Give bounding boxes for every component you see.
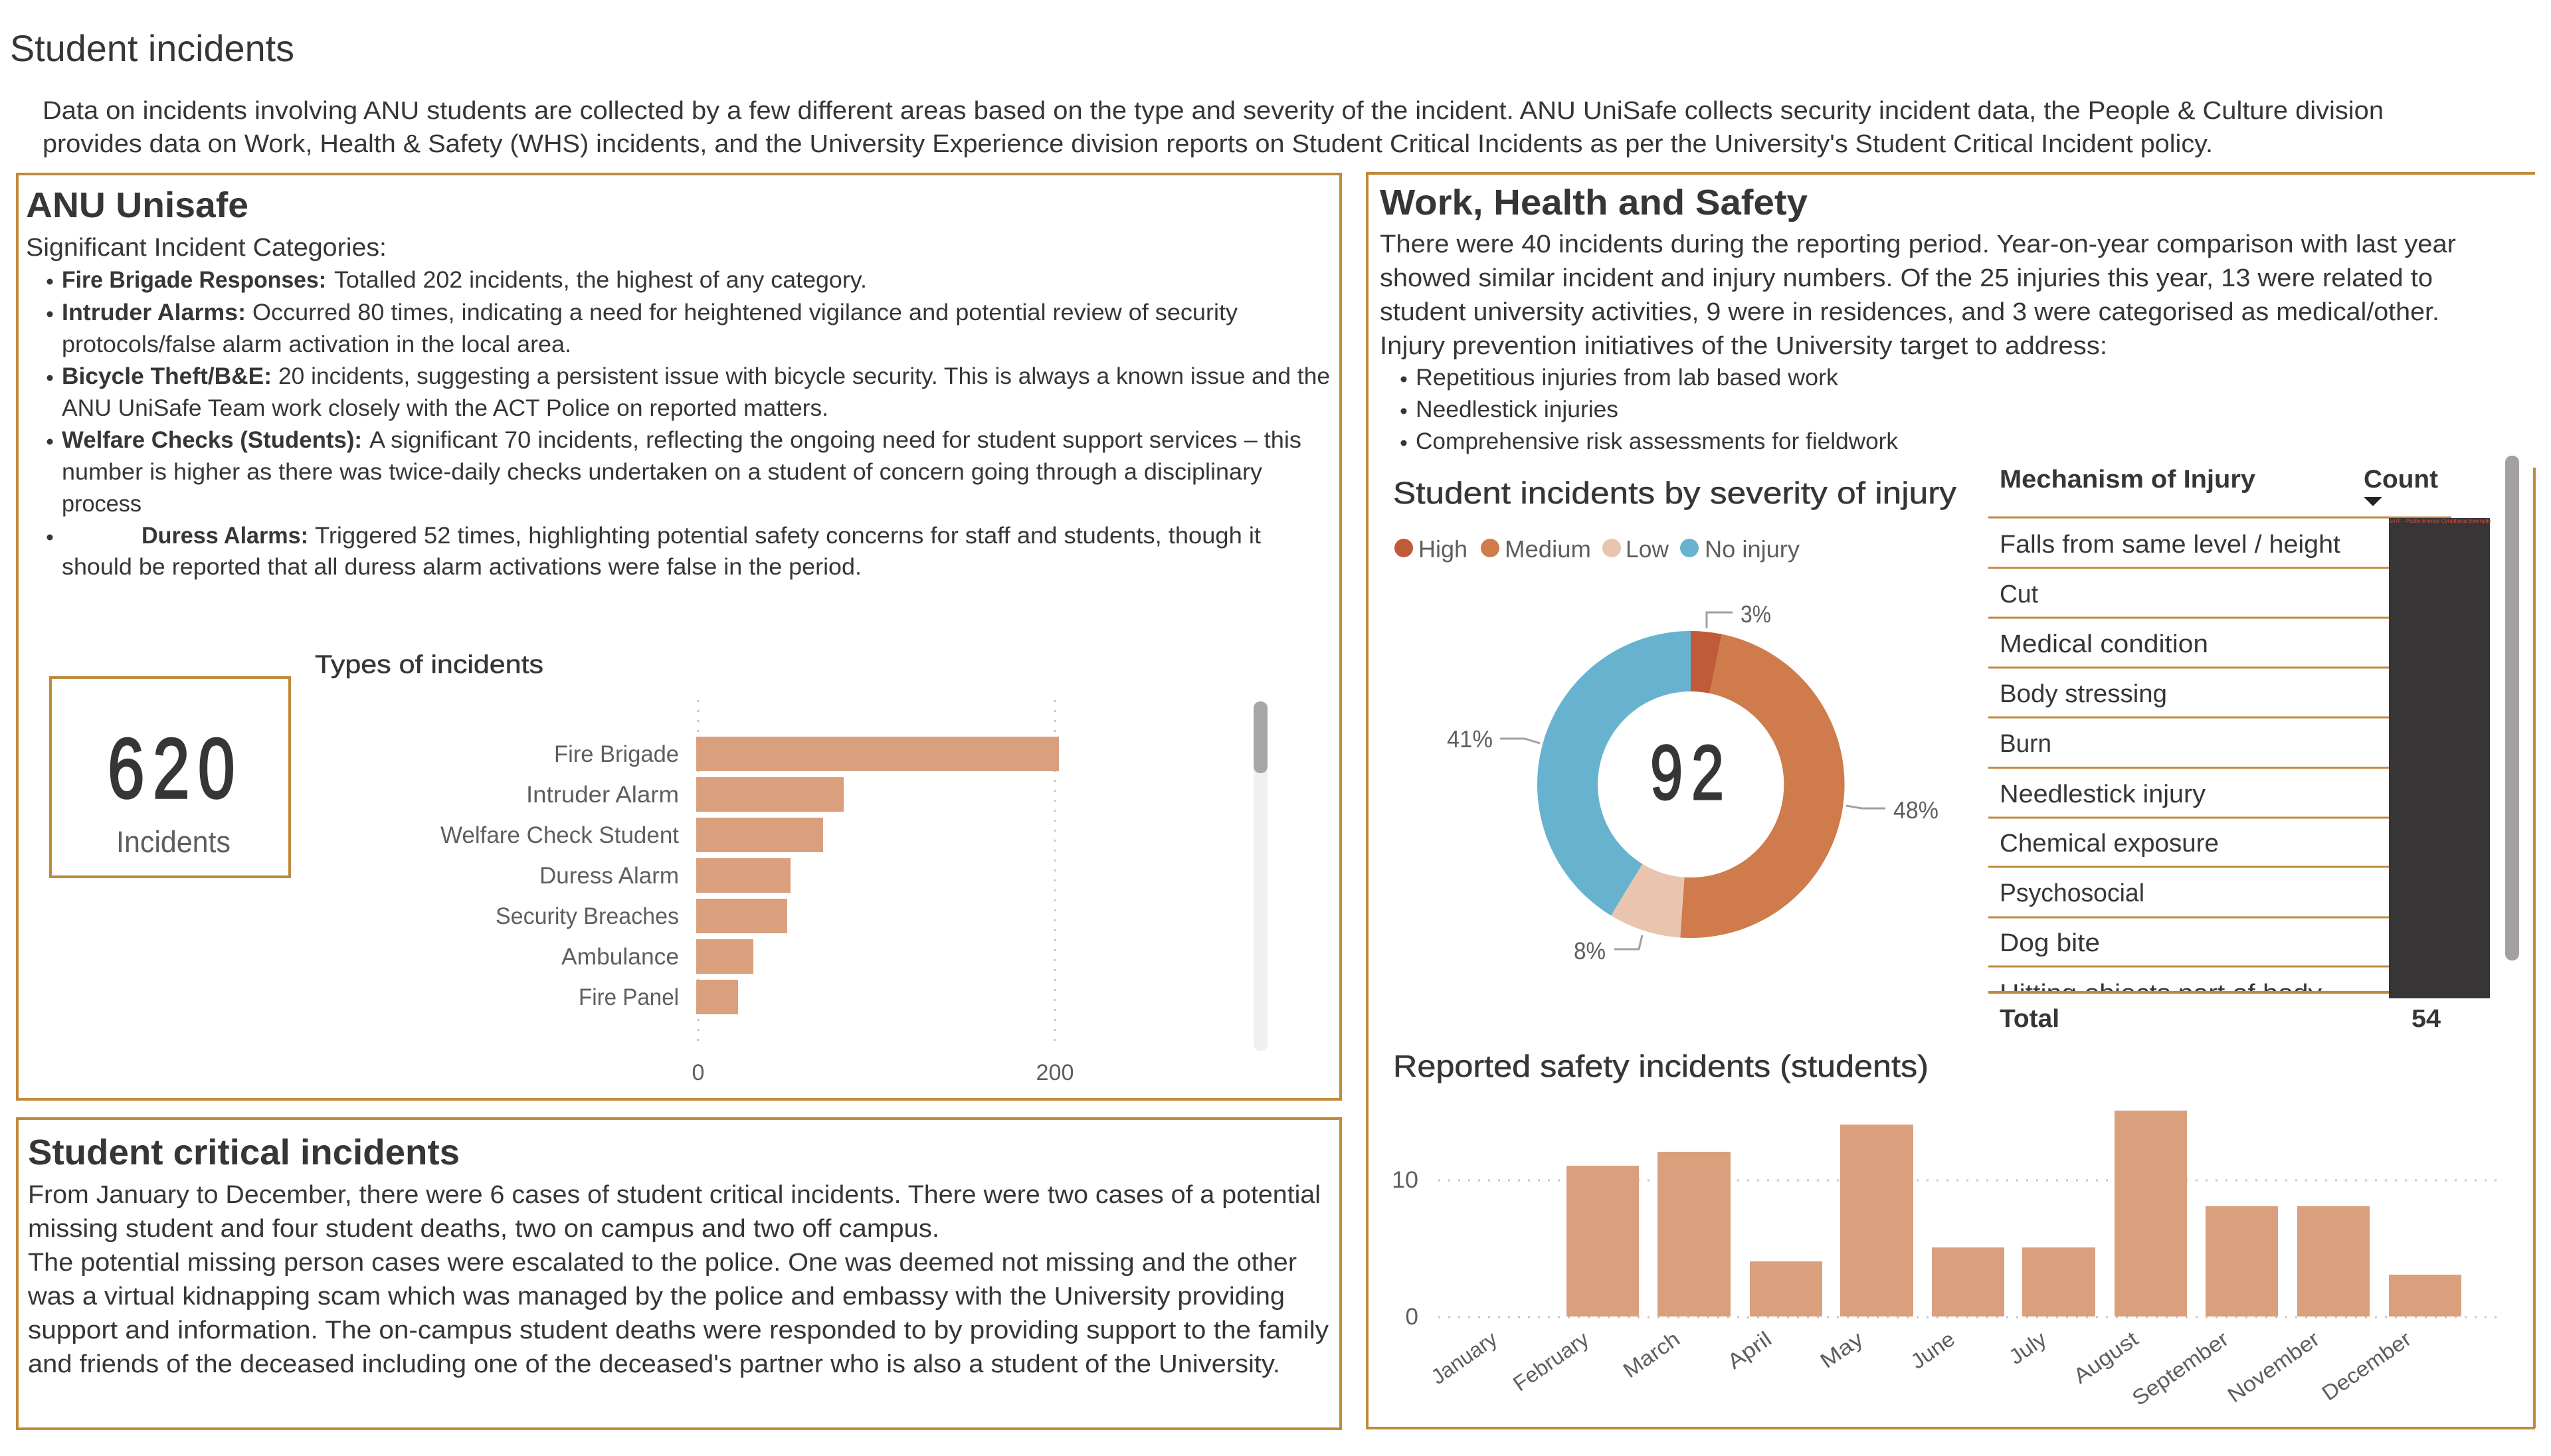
legend: High xyxy=(1418,535,1467,563)
table rows: Cut xyxy=(2000,581,2038,608)
heading: Work, Health and Safety: Work, Health and Safety xyxy=(1380,183,1808,223)
panel: Work, Health and Safety xyxy=(1367,173,2535,1428)
chart title: Student incidents by severity of injury xyxy=(1393,476,1956,510)
heading: Student critical incidents: Student critical incidents xyxy=(28,1133,460,1172)
table: mechanism of injury xyxy=(1988,456,2519,1033)
table rows: Burn xyxy=(2000,730,2051,758)
donut slices xyxy=(1537,631,1845,938)
bullet list: incident categories: Duress Alarms: xyxy=(142,523,308,549)
KPI card: 620 incidents: 620 xyxy=(108,721,243,816)
bullet list: incident categories: process xyxy=(62,491,142,517)
intro text: provides data on Work, Health & Safety (WHS) incidents, and the University Experience division reports on Student Critical Incidents as per the University's Student Critical Incident policy. xyxy=(43,130,2213,158)
month labels xyxy=(1427,1326,2415,1410)
donut centre value: 92 xyxy=(1650,729,1733,816)
heading: ANU Unisafe: ANU Unisafe xyxy=(26,185,248,225)
month labels: September xyxy=(2128,1326,2233,1410)
table scrollbar xyxy=(2505,456,2519,960)
table rows: Hitting objects part of body xyxy=(2000,980,2322,1008)
category labels: Security Breaches xyxy=(496,903,679,929)
bullet list: incident categories: Occurred 80 times, indicating a need for heightened vigilance and potential review of security xyxy=(252,300,1238,325)
category labels: Fire Panel xyxy=(579,984,679,1010)
bullet list: injury prevention xyxy=(1400,365,1898,454)
columns xyxy=(1566,1111,2461,1317)
table total row xyxy=(2000,1005,2441,1033)
month labels: December xyxy=(2317,1326,2415,1406)
data labels xyxy=(1447,600,1938,964)
bullet list: incident categories: protocols/false alarm activation in the local area. xyxy=(62,331,571,357)
redacted count column xyxy=(2389,517,2491,998)
month labels: June xyxy=(1906,1326,1959,1374)
month labels: February xyxy=(1509,1326,1593,1396)
chart title: Types of incidents xyxy=(315,651,543,679)
panel: ANU Unisafe xyxy=(17,174,1341,1099)
chart title: Reported safety incidents (students) xyxy=(1393,1049,1929,1083)
table rows xyxy=(1988,517,2451,1008)
redacted count column: s47F - Public Interest Conditional Exemptio xyxy=(2390,517,2491,524)
table header xyxy=(2000,466,2438,506)
table header: Mechanism of Injury xyxy=(2000,466,2255,494)
y axis labels: 0 xyxy=(1406,1304,1418,1330)
table rows: Dog bite xyxy=(2000,929,2100,957)
bullet list: incident categories: Welfare Checks (Students): xyxy=(62,427,362,453)
table header: Count xyxy=(2364,466,2438,494)
body text: support and information. The on-campus student deaths were responded to by providing support to the family xyxy=(28,1317,1329,1344)
table rows: Falls from same level / height xyxy=(2000,531,2340,559)
legend: Low xyxy=(1626,535,1669,563)
category labels: Intruder Alarm xyxy=(526,782,679,808)
page title: Student incidents xyxy=(10,27,294,69)
category labels: Ambulance xyxy=(561,944,679,970)
chart scrollbar xyxy=(1254,701,1268,1051)
KPI card: 620 incidents xyxy=(50,678,290,877)
table rows: Medical condition xyxy=(2000,630,2208,658)
intro text xyxy=(43,97,2384,158)
bullet list: incident categories: Fire Brigade Responses: xyxy=(62,267,326,293)
bullet list: incident categories: should be reported that all duress alarm activations were false in the period. xyxy=(62,554,862,580)
month labels: April xyxy=(1723,1326,1776,1374)
y axis labels: 10 xyxy=(1392,1167,1418,1193)
bars xyxy=(696,737,1059,1014)
body text xyxy=(27,1181,1329,1378)
month labels: November xyxy=(2223,1326,2324,1408)
data labels: 8% xyxy=(1574,937,1606,964)
column chart: reported safety incidents xyxy=(1392,1049,2497,1410)
body text: showed similar incident and injury numbers. Of the 25 injuries this year, 13 were related to xyxy=(1380,264,2433,292)
bullet list: incident categories: 20 incidents, suggesting a persistent issue with bicycle security. This is always a known issue and the xyxy=(278,363,1330,389)
month labels: March xyxy=(1619,1326,1684,1382)
bullet list: incident categories: Totalled 202 incidents, the highest of any category. xyxy=(334,267,867,293)
body text: The potential missing person cases were escalated to the police. One was deemed not missing and the other xyxy=(28,1249,1297,1277)
bullet list: incident categories xyxy=(47,267,1330,580)
legend: Medium xyxy=(1505,535,1591,563)
bullet list: incident categories: Intruder Alarms: xyxy=(62,300,246,325)
bullet list: incident categories: A significant 70 incidents, reflecting the ongoing need for student support services – this xyxy=(369,427,1301,453)
category labels xyxy=(440,741,679,1010)
category labels: Fire Brigade xyxy=(554,741,679,767)
body text: Injury prevention initiatives of the University target to address: xyxy=(1380,332,2107,360)
value axis xyxy=(692,1060,1074,1085)
month labels: January xyxy=(1427,1326,1501,1389)
legend: No injury xyxy=(1705,535,1800,563)
body text: There were 40 incidents during the reporting period. Year-on-year comparison with last year xyxy=(1380,230,2456,258)
table total row: 54 xyxy=(2411,1005,2441,1033)
KPI card: 620 incidents: Incidents xyxy=(116,825,231,859)
category labels: Welfare Check Student xyxy=(440,822,679,848)
bullet list: injury prevention: Repetitious injuries from lab based work xyxy=(1416,365,1839,391)
month labels: May xyxy=(1816,1326,1867,1373)
donut chart: severity of injury xyxy=(1393,476,1956,964)
body text: was a virtual kidnapping scam which was managed by the police and embassy with the University providing xyxy=(27,1283,1285,1311)
legend xyxy=(1394,535,1800,563)
y axis labels xyxy=(1392,1167,1418,1330)
data labels: 41% xyxy=(1447,725,1493,753)
bullet list: injury prevention: Comprehensive risk assessments for fieldwork xyxy=(1416,428,1898,454)
table rows: Chemical exposure xyxy=(2000,830,2219,858)
bullet list: incident categories: number is higher as there was twice-daily checks undertaken on a student of concern going through a disciplinary xyxy=(62,459,1263,485)
month labels: July xyxy=(2004,1326,2051,1369)
bullet list: incident categories: ANU UniSafe Team work closely with the ACT Police on reported matters. xyxy=(62,395,828,421)
body text: student university activities, 9 were in residences, and 3 were categorised as medical/other. xyxy=(1380,298,2439,326)
value axis: 200 xyxy=(1036,1060,1074,1085)
bullet list: incident categories: Triggered 52 times, highlighting potential safety concerns for staff and students, though it xyxy=(315,523,1261,549)
data labels: 3% xyxy=(1741,600,1771,628)
bullet list: incident categories: Bicycle Theft/B&E: xyxy=(62,363,272,389)
body text xyxy=(1380,230,2456,360)
intro text: Data on incidents involving ANU students are collected by a few different areas based on the type and severity of the incident. ANU UniSafe collects security incident data, the People & Culture division xyxy=(43,97,2384,125)
body text: and friends of the deceased including one of the deceased's partner who is also a student of the University. xyxy=(28,1350,1280,1378)
category labels: Duress Alarm xyxy=(539,863,679,889)
table rows: Psychosocial xyxy=(2000,879,2144,907)
data labels: 48% xyxy=(1893,796,1938,824)
table rows: Body stressing xyxy=(2000,680,2167,708)
bar chart: types of incidents xyxy=(315,651,1268,1085)
subheading: significant incident categories: Significant Incident Categories: xyxy=(26,234,387,262)
panel: Student critical incidents xyxy=(17,1119,1341,1429)
table rows: Needlestick injury xyxy=(2000,780,2206,808)
body text: missing student and four student deaths, two on campus and two off campus. xyxy=(28,1215,939,1243)
body text: From January to December, there were 6 cases of student critical incidents. There were two cases of a potential xyxy=(28,1181,1321,1209)
table total row: Total xyxy=(2000,1005,2059,1033)
value axis: 0 xyxy=(692,1060,704,1085)
month labels: August xyxy=(2069,1326,2142,1388)
bullet list: injury prevention: Needlestick injuries xyxy=(1416,397,1618,422)
